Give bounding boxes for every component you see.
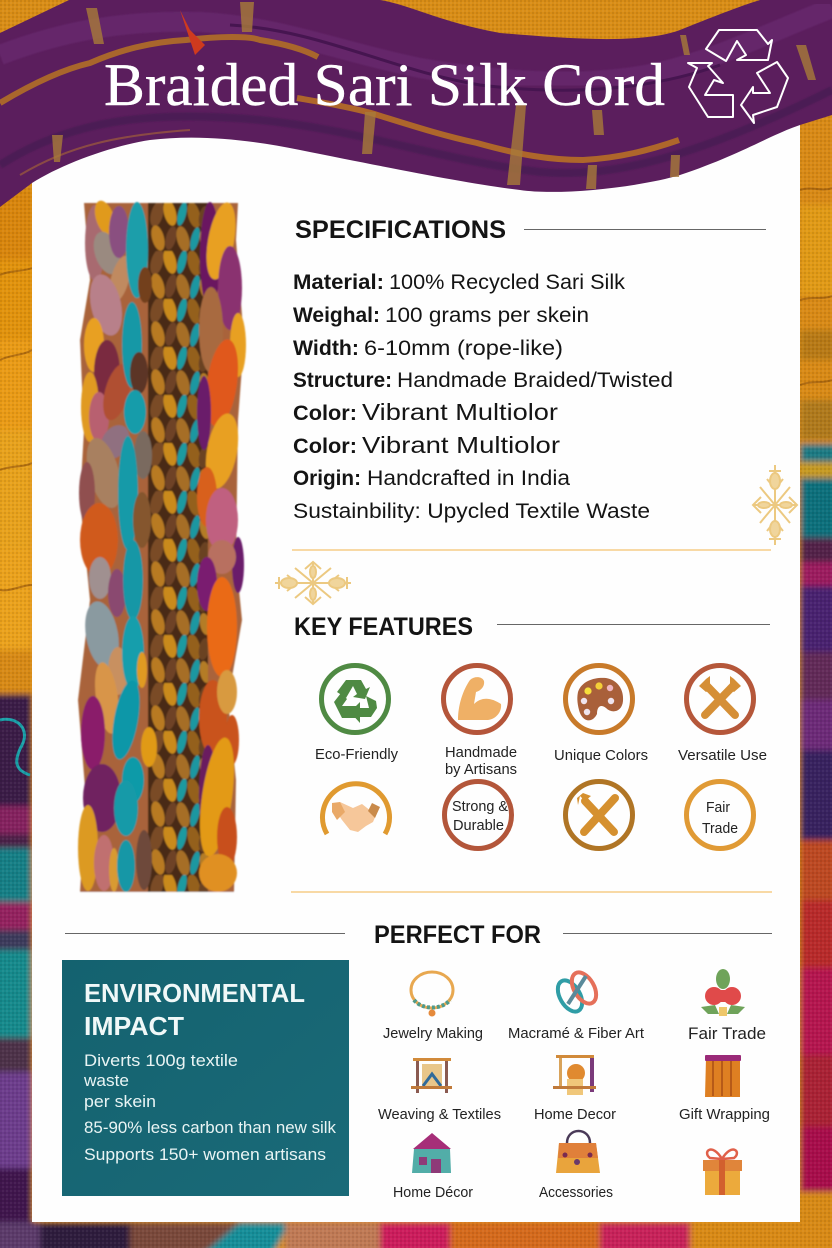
specifications list: Sustainbility: Upycled Textile Waste (293, 499, 650, 523)
specifications list: 6-10mm (rope-like) (364, 336, 563, 360)
use: jewelry making: Jewelry Making (383, 1026, 483, 1042)
feature: fair trade: Fair (706, 800, 730, 816)
feature: strong and durable (444, 782, 512, 848)
use: home decor shelf (534, 1055, 616, 1123)
heading: perfect for: PERFECT FOR (374, 921, 541, 949)
feature: handmade by artisans: Handmade (445, 745, 517, 761)
specifications list: 100 grams per skein (385, 303, 589, 327)
feature: eco-friendly (315, 666, 399, 763)
panel: environmental impact: ENVIRONMENTAL (84, 978, 305, 1008)
panel: environmental impact: Diverts 100g textile (84, 1051, 238, 1070)
use: fair trade (688, 969, 766, 1043)
feature: unique colors (554, 666, 648, 764)
specifications list: Structure: (293, 368, 392, 392)
use: home decor shelf: Home Decor (534, 1107, 616, 1123)
specifications list: Color: (293, 434, 357, 458)
feature: fair trade: Trade (702, 821, 738, 837)
feature: handmade by artisans (444, 666, 517, 778)
specifications list: Material: (293, 270, 384, 294)
specifications list: 100% Recycled Sari Silk (389, 270, 625, 294)
panel: environmental impact: IMPACT (84, 1011, 184, 1041)
icon: gift box (703, 1150, 742, 1195)
title: Braided Sari Silk Cord (104, 52, 665, 118)
specifications list: Handmade Braided/Twisted (397, 368, 673, 392)
panel: environmental impact: 85-90% less carbon than new silk (84, 1118, 336, 1137)
specifications list: Color: (293, 401, 357, 425)
use: weaving and textiles (378, 1058, 501, 1123)
use: weaving and textiles: Weaving & Textiles (378, 1107, 501, 1123)
feature: eco-friendly: Eco-Friendly (315, 747, 399, 763)
purple silk ribbon banner (0, 0, 832, 207)
feature: handmade by artisans: by Artisans (445, 762, 517, 778)
specifications list (293, 270, 673, 523)
specifications list: Vibrant Multiolor (362, 432, 560, 458)
braided cord photo (60, 198, 260, 904)
ornament: gold snowflake right (753, 465, 797, 545)
heading: key features: KEY FEATURES (294, 613, 473, 641)
icon: white recycle symbol (688, 30, 788, 123)
use: gift wrapping curtain (679, 1055, 770, 1123)
panel: environmental impact (62, 960, 349, 1196)
heading: specifications: SPECIFICATIONS (295, 216, 506, 244)
use: macrame and fiber art: Macramé & Fiber Art (508, 1026, 644, 1042)
use: gift wrapping curtain: Gift Wrapping (679, 1107, 770, 1123)
use: accessories bag: Accessories (539, 1185, 613, 1201)
use: jewelry making (383, 972, 483, 1042)
feature: strong and durable: Strong & (452, 799, 508, 815)
feature: versatile use: Versatile Use (678, 748, 767, 764)
specifications list: Origin: (293, 466, 361, 490)
specifications list: Width: (293, 336, 359, 360)
feature: fair trade (686, 782, 754, 848)
feature: tools (566, 782, 632, 848)
use: home decor house (393, 1133, 473, 1201)
use: fair trade: Fair Trade (688, 1024, 766, 1043)
ornament: gold snowflake left (275, 562, 351, 604)
panel: environmental impact: per skein (84, 1092, 156, 1111)
feature: strong and durable: Durable (453, 818, 504, 834)
specifications list: Vibrant Multiolor (362, 399, 558, 425)
use: accessories bag (539, 1131, 613, 1201)
specifications list: Weighal: (293, 303, 380, 327)
feature: unique colors: Unique Colors (554, 748, 648, 764)
use: macrame and fiber art (508, 968, 644, 1042)
feature: handshake (322, 784, 390, 834)
feature: versatile use (678, 666, 767, 764)
panel: environmental impact: waste (83, 1071, 129, 1090)
panel: environmental impact: Supports 150+ women artisans (84, 1145, 326, 1164)
use: home decor house: Home Décor (393, 1185, 473, 1201)
specifications list: Handcrafted in India (367, 466, 570, 490)
